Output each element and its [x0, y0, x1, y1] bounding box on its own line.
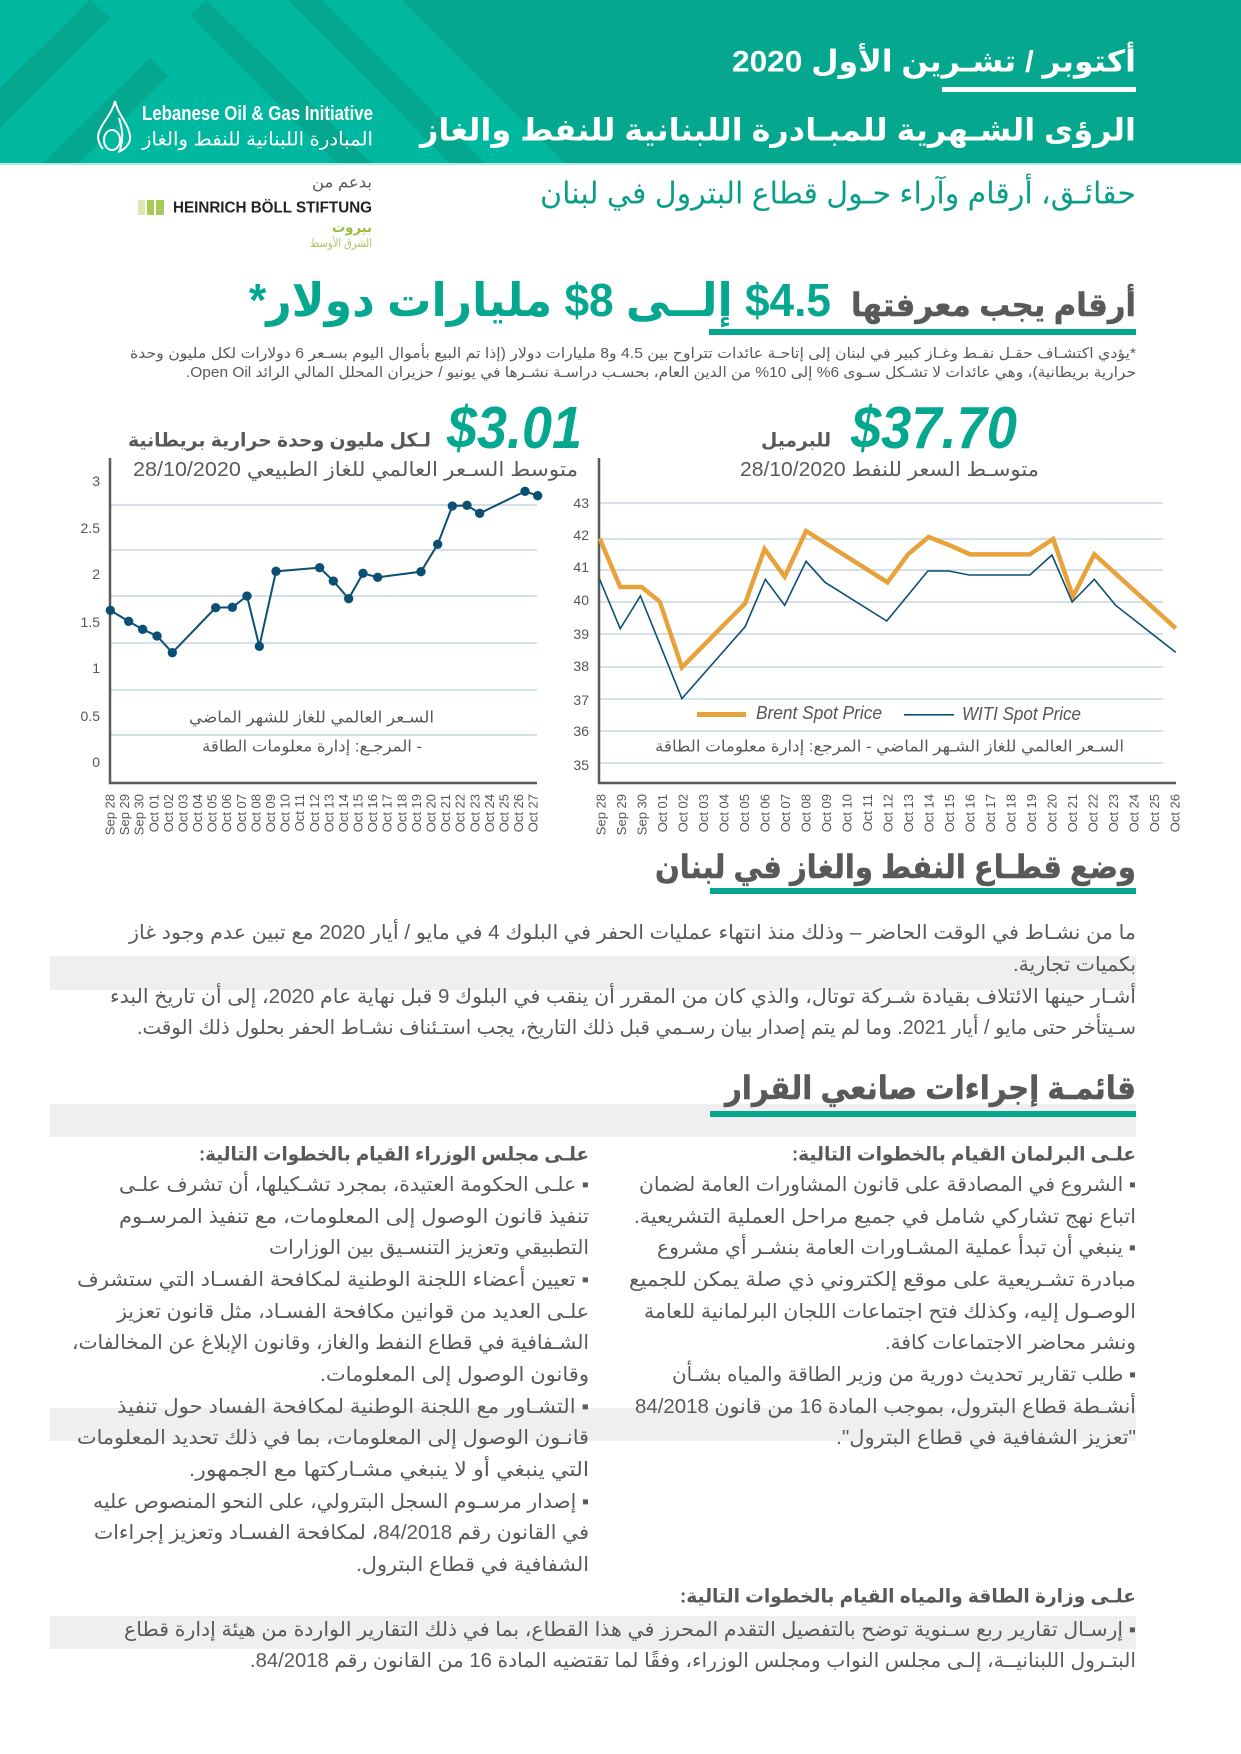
date underline	[942, 87, 1136, 92]
oil x axis labels: Oct 17	[983, 794, 998, 832]
gas x axis labels: Oct 04	[190, 794, 205, 832]
oil x axis labels: Oct 15	[942, 794, 957, 832]
oil x axis labels: Oct 01	[655, 794, 670, 832]
oil price callout: للبرميل	[761, 430, 831, 452]
oil x axis labels: Sep 28	[594, 794, 608, 835]
header banner	[0, 0, 1241, 165]
oil chart legend: Brent Spot Price	[756, 703, 882, 723]
sponsor block	[138, 174, 372, 251]
gas x axis labels: Oct 14	[336, 794, 351, 832]
oil x axis labels: Oct 20	[1044, 794, 1060, 832]
oil x axis labels: Oct 09	[819, 794, 834, 832]
oil x axis labels: Oct 03	[696, 794, 711, 832]
column: cabinet: في القانون رقم 84/2018، لمكافحة الفسـاد وتعزيز إجراءات	[94, 1522, 589, 1545]
oil y axis labels: 39	[573, 626, 589, 642]
gas x axis labels: Sep 28	[102, 794, 118, 835]
logo text: Lebanese Oil & Gas Initiative	[142, 103, 373, 125]
oil chart legend	[697, 703, 1081, 724]
gas x axis labels: Oct 07	[234, 794, 249, 832]
Brent series	[600, 531, 1176, 667]
gas price callout	[128, 395, 582, 482]
gas x axis labels: Oct 24	[482, 794, 497, 832]
gas x axis labels: Oct 10	[278, 794, 293, 832]
column: cabinet: تنفيذ قانون الوصول إلى المعلومات، مع تنفيذ المرسـوم	[119, 1206, 589, 1229]
date title: أكتوبر / تشـرين الأول 2020	[732, 42, 1136, 80]
gas x axis labels: Oct 11	[292, 794, 307, 831]
gas x axis labels: Oct 18	[394, 794, 409, 832]
column: cabinet: قانـون الوصول إلى المعلومات، بما في ذلك تحديد المعلومات	[77, 1427, 589, 1450]
section heading: policy makers: قائمـة إجراءات صانعي القرار	[723, 1070, 1136, 1108]
oil y axis labels: 42	[573, 527, 589, 543]
block: energy ministry: علـى وزارة الطاقة والمياه القيام بالخطوات التالية:	[680, 1586, 1136, 1608]
gas x axis labels: Oct 20	[424, 794, 438, 832]
gas x axis labels: Oct 27	[526, 794, 541, 832]
gas x axis labels: Oct 26	[511, 794, 526, 832]
sponsor block: بدعم من	[312, 174, 372, 192]
gas y axis labels: 2.5	[81, 520, 100, 536]
gas y axis labels: 3	[92, 473, 100, 489]
oil y axis labels: 43	[573, 495, 589, 511]
gas x axis labels: Oct 13	[321, 794, 336, 832]
oil x axis labels: Oct 10	[840, 794, 854, 832]
column: parliament: الوصـول إليه، وكذلك فتح اجتماعات اللجان البرلمانية للعامة	[644, 1301, 1136, 1324]
footnote: *يؤدي اكتشـاف حقـل نفـط وغـاز كبير في لبنان إلى إتاحـة عائدات تتراوح بين 4.5 و8 مليارات دولار (إذا تم البيع بأموال اليوم بسـعر 6 دولارات لكل مليون وحدة	[130, 343, 1136, 362]
oil price callout	[740, 395, 1039, 481]
block: energy ministry: البتـرول اللبنانيــة، إلـى مجلس النواب ومجلس الوزراء، وفقًا لما تقتضيه المادة 16 من القانون رقم 84/2018.	[250, 1650, 1136, 1673]
column: parliament: ▪ الشروع في المصادقة على قانون المشاورات العامة لضمان	[639, 1174, 1136, 1197]
gas x axis labels: Oct 21	[438, 794, 453, 832]
column: cabinet: ▪ علـى الحكومة العتيدة، بمجرد تشـكيلها، أن تشرف علـى	[119, 1171, 589, 1196]
oil x axis labels	[594, 794, 1182, 835]
oil x axis labels: Oct 13	[901, 794, 916, 832]
gas y axis labels: 1	[92, 660, 100, 676]
oil x axis labels: Oct 25	[1147, 794, 1162, 832]
oil y axis labels: 35	[573, 757, 589, 773]
background stripes	[50, 956, 1136, 1649]
gas x axis labels: Oct 22	[453, 794, 468, 832]
column: parliament: علـى البرلمان القيام بالخطوات التالية:	[792, 1144, 1136, 1166]
heading underline	[709, 329, 1136, 335]
oil x axis labels: Sep 30	[634, 794, 650, 835]
gas chart source note: السـعر العالمي للغاز للشهر الماضي	[189, 710, 434, 728]
status paragraph: ما من نشـاط في الوقت الحاضر – وذلك منذ انتهاء عمليات الحفر في البلوك 4 في مايو / أيار 2020 مع تبين عدم وجود غاز	[128, 919, 1136, 945]
gas x axis labels: Oct 09	[263, 794, 278, 832]
column: cabinet: ▪ تعيين أعضاء اللجنة الوطنية لمكافحة الفسـاد التي ستشرف	[77, 1266, 589, 1292]
gas price series	[106, 487, 542, 657]
gas x axis labels	[102, 794, 541, 835]
gas price callout: $3.01	[446, 395, 582, 461]
oil x axis labels: Oct 07	[778, 794, 793, 832]
oil x axis labels: Oct 06	[758, 794, 772, 832]
column: parliament: ▪ ينبغي أن تبدأ عملية المشـاورات العامة بنشـر أي مشروع	[657, 1234, 1136, 1260]
oil x axis labels: Sep 29	[614, 794, 629, 835]
gas y axis labels: 2	[92, 566, 100, 582]
column: cabinet: علـى العديد من قوانين مكافحة الفسـاد، مثل قانون تعزيز	[116, 1301, 589, 1323]
line chart: gas price	[81, 458, 542, 835]
sponsor block: الشرق الأوسط	[310, 235, 372, 251]
oil price callout: $37.70	[850, 395, 1017, 461]
oil x axis labels: Oct 23	[1106, 794, 1121, 832]
column: parliament: ونشر محاضر الاجتماعات كافة.	[885, 1332, 1136, 1354]
section heading: status of sector: وضع قطـاع النفط والغاز في لبنان	[655, 849, 1136, 886]
oil x axis labels: Oct 18	[1004, 794, 1018, 832]
column: parliament: اتباع نهج تشاركي شامل في جميع مراحل العملية التشريعية.	[634, 1206, 1136, 1229]
oil chart source note: السـعر العالمي للغاز الشـهر الماضي - المرجع: إدارة معلومات الطاقة	[655, 738, 1124, 756]
WTI series	[600, 555, 1176, 699]
oil price callout: متوسـط السعر للنفط 28/10/2020	[740, 459, 1039, 481]
gas y axis labels: 0	[92, 754, 100, 770]
oil y axis labels: 41	[573, 559, 589, 575]
oil x axis labels: Oct 11	[860, 794, 875, 831]
column: cabinet	[72, 1144, 589, 1577]
column: parliament: "تعزيز الشفافية في قطاع البترول".	[836, 1427, 1136, 1450]
column: cabinet: وقانون الوصول إلى المعلومات.	[320, 1364, 589, 1387]
column: cabinet: ▪ إصدار مرسـوم السجل البترولي، على النحو المنصوص عليه	[93, 1491, 589, 1514]
status paragraph	[110, 919, 1136, 1040]
gas y axis labels	[81, 473, 100, 770]
heading: numbers to know: أرقام يجب معرفتها	[851, 284, 1136, 324]
oil x axis labels: Oct 19	[1024, 794, 1039, 832]
sponsor block: بيروت	[332, 219, 372, 236]
gas x axis labels: Sep 30	[132, 794, 147, 835]
header banner: المبادرة اللبنانية للنفط والغاز	[141, 130, 373, 150]
oil x axis labels: Oct 05	[737, 794, 752, 832]
oil y axis labels	[573, 495, 589, 773]
line chart: oil price	[573, 458, 1182, 835]
gas x axis labels: Oct 17	[380, 794, 395, 832]
gas x axis labels: Oct 25	[496, 794, 511, 832]
gas chart source note: - المرجـع: إدارة معلومات الطاقة	[202, 738, 422, 756]
column: parliament: ▪ طلب تقارير تحديث دورية من وزير الطاقة والمياه بشـأن	[672, 1360, 1136, 1386]
column: cabinet: الشفافية في قطاع البترول.	[356, 1554, 589, 1577]
block: energy ministry: ▪ إرسـال تقارير ربع سـنوية توضح بالتفصيل التقدم المحرز في هذا القطاع، بما في ذلك التقارير الواردة من هيئة إدارة قطاع	[124, 1619, 1136, 1642]
status paragraph: سـيتأخر حتى مايو / أيار 2021. وما لم يتم إصدار بيان رسـمي قبل ذلك التاريخ، يجب استـئناف نشـاط الحفر بحلول ذلك الوقت.	[137, 1013, 1136, 1040]
oil chart legend: WITI Spot Price	[962, 704, 1081, 724]
column: parliament	[629, 1144, 1136, 1450]
gas x axis labels: Oct 08	[248, 794, 263, 832]
heading: numbers to know	[249, 274, 1136, 335]
logo icon	[98, 101, 130, 152]
oil y axis labels: 36	[573, 723, 589, 739]
oil x axis labels: Oct 12	[880, 794, 896, 832]
gas x axis labels: Oct 12	[307, 794, 322, 832]
gas x axis labels: Oct 19	[409, 794, 424, 832]
gas x axis labels: Sep 29	[117, 794, 132, 835]
oil x axis labels: Oct 16	[962, 794, 978, 832]
section heading: policy makers	[710, 1070, 1136, 1117]
headline figure: $4.5 إلــى 8$ مليارات دولار*	[249, 274, 831, 328]
column: cabinet: التي ينبغي أو لا ينبغي مشـاركتها مع الجمهور.	[189, 1456, 589, 1482]
oil y axis labels: 40	[573, 592, 589, 608]
oil x axis labels: Oct 24	[1126, 794, 1142, 832]
subtitle: حقائـق، أرقام وآراء حـول قطاع البترول في لبنان	[540, 172, 1136, 212]
oil y axis labels: 38	[573, 658, 589, 674]
oil x axis labels: Oct 22	[1086, 794, 1100, 832]
gas x axis labels: Oct 02	[161, 794, 176, 832]
column: parliament: مبادرة تشـريعية على موقع إلكتروني ذي صلة يمكن للجميع	[629, 1269, 1136, 1292]
oil x axis labels: Oct 02	[676, 794, 690, 832]
status paragraph: بكميات تجارية.	[1013, 954, 1136, 976]
oil x axis labels: Oct 21	[1065, 794, 1080, 832]
block: energy ministry	[124, 1586, 1136, 1673]
oil x axis labels: Oct 14	[922, 794, 936, 832]
gas x axis labels: Oct 01	[146, 794, 161, 832]
column: parliament: أنشـطة قطاع البترول، بموجب المادة 16 من قانون 84/2018	[635, 1393, 1136, 1418]
sponsor logo squares	[138, 200, 164, 215]
gas price callout: متوسط السـعر العالمي للغاز الطبيعي 28/10/2020	[133, 459, 578, 482]
oil y axis labels: 37	[573, 692, 589, 708]
gas x axis labels: Oct 03	[176, 794, 190, 832]
status paragraph: أشـار حينها الائتلاف بقيادة شـركة توتال، والذي كان من المقرر أن ينقب في البلوك 9 قبل نهاية عام 2020، إلى أن تاريخ البدء	[110, 983, 1136, 1009]
gas x axis labels: Oct 15	[350, 794, 366, 832]
gas chart source note	[189, 710, 434, 756]
oil x axis labels: Oct 04	[716, 794, 732, 832]
gas x axis labels: Oct 06	[219, 794, 234, 832]
oil x axis labels: Oct 26	[1168, 794, 1182, 832]
gas y axis labels: 1.5	[81, 614, 100, 630]
column: cabinet: الشـفافية في قطاع النفط والغاز، وقانون الإبلاغ عن المخالفات،	[72, 1332, 589, 1355]
gas x axis labels: Oct 05	[205, 794, 220, 832]
gas x axis labels: Oct 16	[365, 794, 380, 832]
column: cabinet: ▪ التشـاور مع اللجنة الوطنية لمكافحة الفساد حول تنفيذ	[117, 1396, 589, 1418]
gas x axis labels: Oct 23	[467, 794, 482, 832]
report title: الرؤى الشـهرية للمبـادرة اللبنانية للنفط والغاز	[418, 112, 1136, 148]
footnote	[130, 343, 1136, 381]
footnote: حرارية بريطانية)، وهي عائدات لا تشـكل سـوى 6% إلى 10% من الدين العام، بحسـب دراسـة نشـرها في يونيو / حزيران المحلل المالي الرائد Open Oil.	[186, 365, 1136, 381]
column: cabinet: علـى مجلس الوزراء القيام بالخطوات التالية:	[199, 1144, 589, 1166]
gas y axis labels: 0.5	[81, 708, 100, 724]
sponsor name: HEINRICH BÖLL STIFTUNG	[173, 198, 372, 216]
column: cabinet: التطبيقي وتعزيز التنسـيق بين الوزارات	[269, 1237, 589, 1260]
gas price callout: لـكل مليون وحدة حرارية بريطانية	[128, 430, 431, 452]
oil x axis labels: Oct 08	[798, 794, 814, 832]
